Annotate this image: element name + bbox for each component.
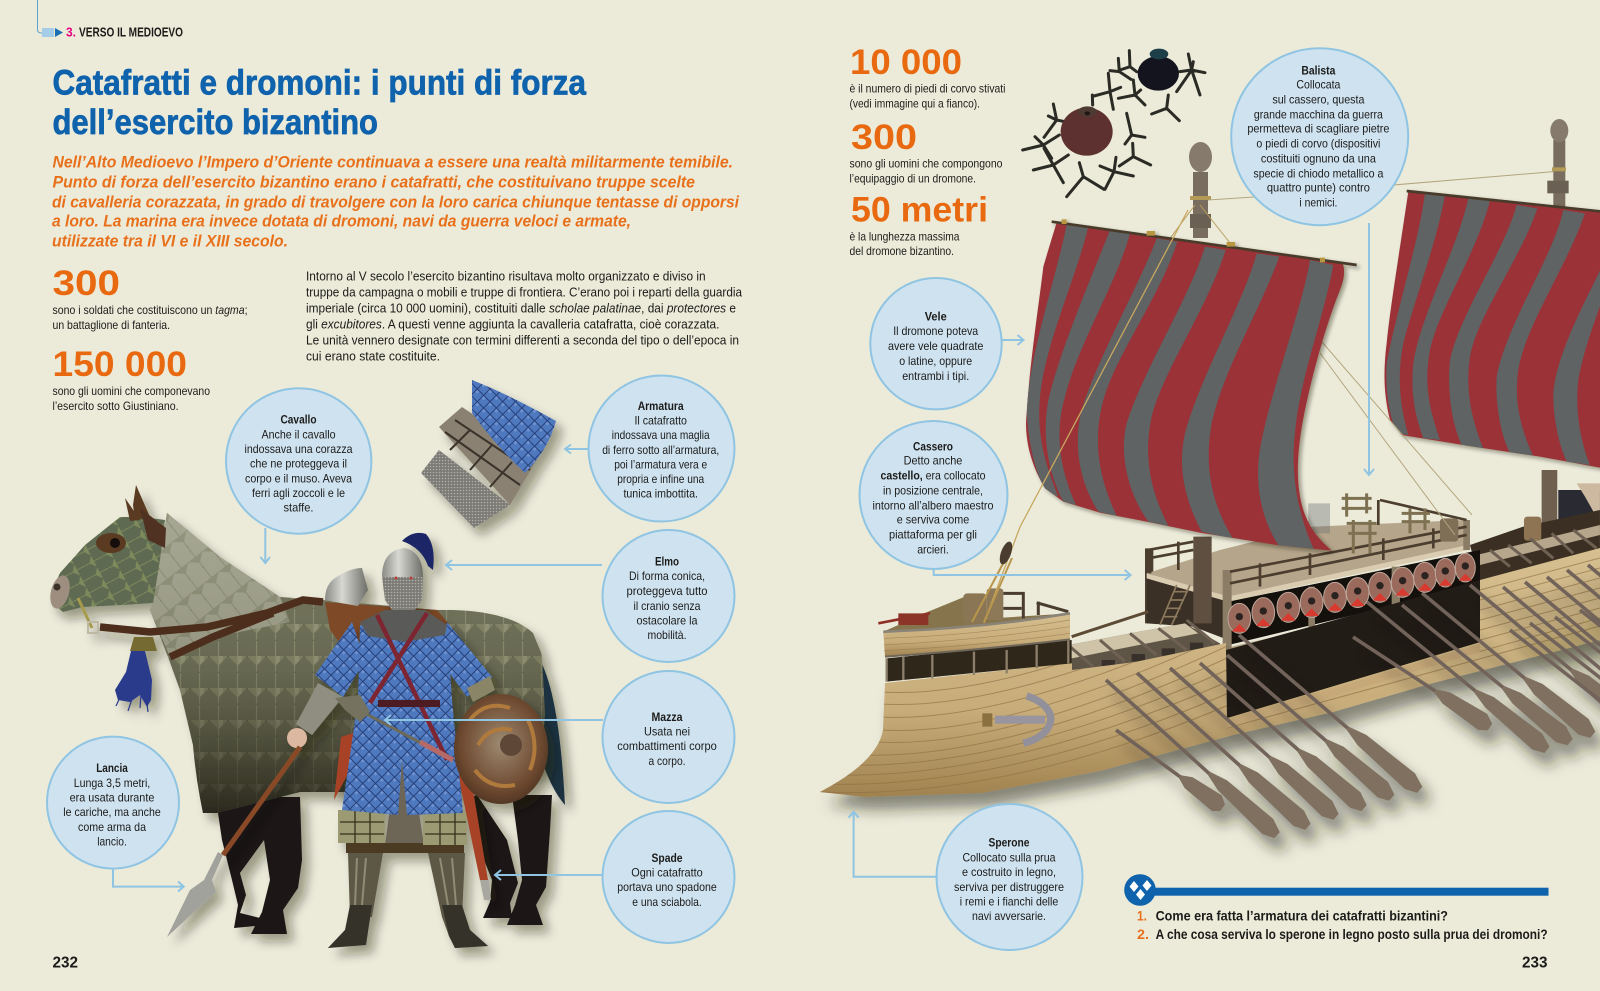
callout: Cassero: Detto anche <box>904 454 963 468</box>
callout: Cassero: intorno all’albero maestro <box>872 498 994 512</box>
illustration: front sail <box>1020 210 1370 557</box>
callout: Cassero: e serviva come <box>897 513 969 527</box>
horse rear legs <box>465 795 552 925</box>
title <box>52 63 586 142</box>
horse strap and bell <box>100 600 323 657</box>
callout: Spade: Ogni catafratto <box>631 866 703 880</box>
page number 232: 232 <box>52 954 78 971</box>
review questions box: Come era fatta l’armatura dei catafratti bizantini? <box>1156 909 1448 924</box>
callout: Vele: avere vele quadrate <box>888 339 984 353</box>
rear mast lower part and tent <box>1542 470 1600 537</box>
callout: Lancia <box>47 737 179 869</box>
stat: 150 000 uomini: sono gli uomini che componevano <box>52 384 210 398</box>
callout: Balista: specie di chiodo metallico a <box>1253 167 1384 181</box>
callout: Sperone <box>936 804 1082 950</box>
callout: Elmo: mobilità. <box>648 628 686 642</box>
balistas on the deck <box>1342 493 1430 553</box>
soldier forearms and hand <box>296 683 343 735</box>
callout: Elmo: Elmo <box>655 554 679 568</box>
callout: Spade <box>602 811 734 943</box>
callout: Armatura: indossava una maglia <box>612 428 710 442</box>
callout: Spade: Spade <box>652 851 683 865</box>
rear mast top <box>1393 119 1569 207</box>
anchor <box>982 696 1051 743</box>
hull planking <box>820 548 1600 797</box>
callout: Balista: Balista <box>1301 64 1336 78</box>
callout: Sperone: e costruito in legno, <box>962 865 1056 879</box>
arrow: Spade <box>495 870 603 880</box>
callout: Armatura: di ferro sotto all’armatura, <box>602 443 719 457</box>
callout: Lancia: lancio. <box>97 835 127 849</box>
review questions box <box>1124 874 1548 942</box>
horse body armour <box>150 513 545 813</box>
stat: 300 soldati: sono i soldati che costituiscono un tagma; <box>52 303 248 317</box>
arrow: Elmo <box>446 560 602 570</box>
forecastle <box>878 588 1072 743</box>
review questions box: A che cosa serviva lo sperone in legno posto sulla prua dei dromoni? <box>1156 927 1548 942</box>
callout: Cassero: arcieri. <box>917 542 949 556</box>
oars <box>1100 558 1600 842</box>
soldier legs and boots <box>328 853 488 948</box>
callout: Cassero: piattaforma per gli <box>889 528 977 542</box>
callout: Cassero: Cassero <box>913 440 953 454</box>
callout: Balista <box>1231 48 1408 225</box>
callout: Sperone: serviva per distruggere <box>954 880 1064 894</box>
soldier coat <box>342 625 463 815</box>
body paragraph: Intorno al V secolo l’esercito bizantino risultava molto organizzato e diviso in <box>306 269 706 284</box>
horse head <box>52 517 165 612</box>
callout: Vele <box>870 278 1002 409</box>
body paragraph: imperiale (circa 10 000 uomini), costituiti dalle scholae palatinae, dai protectores e <box>306 301 736 316</box>
stat: 150 000 uomini: 150 000 <box>52 345 187 384</box>
callout: Mazza: Usata nei <box>644 724 690 738</box>
soldier scabbards <box>334 732 488 880</box>
callout: Vele: Il dromone poteva <box>893 324 978 338</box>
stat: 300 uomini: l’equipaggio di un dromone. <box>850 172 976 186</box>
soldier mantle, straps and belt <box>360 610 447 642</box>
callout: Balista: permetteva di scagliare pietre <box>1247 122 1390 136</box>
callout: Cavallo: Anche il cavallo <box>262 427 336 441</box>
callout: Vele: o latine, oppure <box>899 354 972 368</box>
callout: Balista: o piedi di corvo (dispositivi <box>1256 137 1380 151</box>
callout: Spade: e una sciabola. <box>632 895 702 909</box>
arrow: Armatura <box>565 444 588 454</box>
body paragraph <box>306 269 743 364</box>
callout: Balista: quattro punte) contro <box>1267 181 1370 195</box>
callout: Elmo <box>602 530 734 662</box>
callout: Vele: entrambi i tipi. <box>902 369 969 383</box>
callout: Balista: i nemici. <box>1299 196 1337 210</box>
body paragraph: truppe da campagna o mobili e truppe di frontiera. C’erano poi i reparti della guardia <box>306 285 743 300</box>
callout: Sperone: navi avversarie. <box>972 909 1046 923</box>
callout: Sperone: Collocato sulla prua <box>962 851 1056 865</box>
stat: 50 metri: 50 metri <box>851 191 988 230</box>
intro text: Punto di forza dell’esercito bizantino erano i catafratti, che costituivano truppe scelte <box>52 174 695 192</box>
arrow: Lancia <box>113 868 184 892</box>
stat: 50 metri <box>850 191 988 258</box>
callout: Cavallo: che ne proteggeva il <box>250 457 347 471</box>
stat: 300 uomini <box>850 118 1003 186</box>
callout: Balista: costituiti ognuno da una <box>1261 152 1376 166</box>
callout: Spade: portava uno spadone <box>617 880 717 894</box>
soldier head and helmet <box>382 577 423 610</box>
intro text <box>52 154 739 251</box>
foredeck between forecastle and cassero <box>1060 612 1220 683</box>
callout: Cavallo: ferri agli zoccoli e le <box>252 486 345 500</box>
horse tail <box>538 660 565 805</box>
stat: 300 uomini: 300 <box>851 118 917 157</box>
stat: 10 000: è il numero di piedi di corvo stivati <box>850 82 1006 96</box>
arrow: Vele <box>1002 335 1024 345</box>
callout: Armatura: Il catafratto <box>634 414 687 428</box>
horse front legs <box>217 797 302 934</box>
forestay rope and pulley <box>972 210 1188 623</box>
callout: Cavallo: corpo e il muso. Aveva <box>245 471 352 485</box>
callout: Armatura <box>588 376 734 522</box>
shields <box>1228 553 1475 633</box>
arrow: Balista <box>1364 223 1374 475</box>
callout: Cassero: castello, era collocato <box>880 469 986 483</box>
callout: Mazza: combattimenti corpo <box>617 739 717 753</box>
callout: Elmo: il cranio senza <box>634 599 701 613</box>
stat: 300 soldati: un battaglione di fanteria. <box>52 318 170 332</box>
callout: Lancia: Lunga 3,5 metri, <box>74 776 150 790</box>
review questions box: 1. <box>1137 908 1147 924</box>
callout: Vele: Vele <box>925 310 947 324</box>
arrow: Cassero <box>934 569 1131 580</box>
callout: Armatura: tunica imbottita. <box>623 487 698 501</box>
intro text: utilizzate tra il VI e il XIII secolo. <box>52 233 288 251</box>
body paragraph: Le unità vennero designate con termini differenti a seconda del tipo o dell’epoca in <box>306 333 739 348</box>
arrow: Cavallo <box>260 528 270 563</box>
callout: Armatura: Armatura <box>638 399 684 413</box>
page number 233: 233 <box>1522 954 1548 971</box>
rear deck band <box>1470 510 1600 582</box>
stat: 50 metri: è la lunghezza massima <box>850 230 960 244</box>
body paragraph: gli excubitores. A questi venne aggiunta la cavalleria catafratta, cioè corazzata. <box>306 317 719 332</box>
callout: Mazza: Mazza <box>652 710 683 724</box>
stat: 300 uomini: sono gli uomini che compongono <box>850 157 1003 171</box>
deck structure <box>1145 493 1600 718</box>
body paragraph: cui erano state costituite. <box>306 349 440 364</box>
callout: Balista: sul cassero, questa <box>1272 93 1365 107</box>
soldier skirt <box>385 755 424 845</box>
intro text: a loro. La marina era invece dotata di dromoni, navi da guerra veloci e armate, <box>52 213 631 231</box>
cassero railings <box>1148 500 1467 587</box>
soldier shield <box>454 694 548 804</box>
saddle and spare helmet <box>325 602 450 650</box>
ladder <box>1160 585 1190 625</box>
stat: 50 metri: del dromone bizantino. <box>850 244 954 258</box>
callout: Lancia: era usata durante <box>70 790 155 804</box>
callout: Armatura: propria e infine una <box>617 472 704 486</box>
callout: Cavallo: Cavallo <box>280 412 316 426</box>
callout: Cassero: in posizione centrale, <box>883 484 983 498</box>
callout: Sperone: Sperone <box>988 836 1030 850</box>
illustration: front mast and rigging <box>1165 142 1472 535</box>
illustration: dromon hull and decks <box>820 493 1600 842</box>
cassero platform <box>1145 548 1153 623</box>
callout: Armatura: poi l’armatura vera e <box>614 458 707 472</box>
illustration: rear sail and mast <box>1373 119 1600 537</box>
title: Catafratti e dromoni: i punti di forza <box>52 63 586 102</box>
running header: VERSO IL MEDIOEVO <box>79 26 183 40</box>
review questions box: 2. <box>1137 926 1149 942</box>
soldier lance <box>223 747 300 855</box>
callout: Mazza <box>602 671 734 803</box>
stat: 10 000: (vedi immagine qui a fianco). <box>850 97 980 111</box>
callout: Balista: Collocata <box>1296 78 1341 92</box>
callout: Cavallo: indossava una corazza <box>244 442 353 456</box>
callout: Lancia: le cariche, ma anche <box>63 805 161 819</box>
callout: Elmo: ostacolare la <box>636 614 698 628</box>
soldier mace <box>355 708 453 760</box>
rear sail cloth <box>1384 190 1600 472</box>
callout: Sperone: i remi e i fianchi delle <box>960 895 1059 909</box>
illustration: armoured horse <box>47 485 565 934</box>
callout: Balista: grande macchina da guerra <box>1254 108 1383 122</box>
illustration: cataphract soldier <box>167 533 548 948</box>
callout: Elmo: proteggeva tutto <box>626 584 708 598</box>
callout: Cassero <box>860 421 1008 569</box>
illustration: fire pots and caltrops <box>1023 49 1205 197</box>
icon: diamonds <box>1124 874 1156 906</box>
callout: Cavallo: staffe. <box>284 501 314 515</box>
callout: Cavallo <box>226 388 371 534</box>
callout: Mazza: a corpo. <box>648 754 686 768</box>
arrow: Sperone <box>849 812 938 877</box>
illustration: armour layers <box>421 380 556 528</box>
stat: 150 000 uomini <box>52 345 210 413</box>
stat: 300 soldati: 300 <box>52 264 120 303</box>
stat: 150 000 uomini: l’esercito sotto Giustiniano. <box>52 399 178 413</box>
callout: Lancia: come arma da <box>78 820 146 834</box>
stat: 10 000: 10 000 <box>850 43 962 82</box>
callout: Elmo: Di forma conica, <box>629 569 705 583</box>
running header <box>38 0 183 40</box>
questions bar <box>1150 888 1548 896</box>
arrow: Mazza <box>385 715 603 725</box>
intro text: Nell’Alto Medioevo l’Impero d’Oriente continuava a essere una realtà militarmente temibile. <box>52 154 733 172</box>
stat: 10 000 <box>850 43 1006 111</box>
running header: 3. <box>66 26 76 40</box>
callout: Lancia: Lancia <box>96 761 128 775</box>
intro text: di cavalleria corazzata, in grado di travolgere con la loro carica chiunque tentasse di opporsi <box>52 193 739 211</box>
stat: 300 soldati <box>52 264 248 332</box>
title: dell’esercito bizantino <box>52 103 378 142</box>
